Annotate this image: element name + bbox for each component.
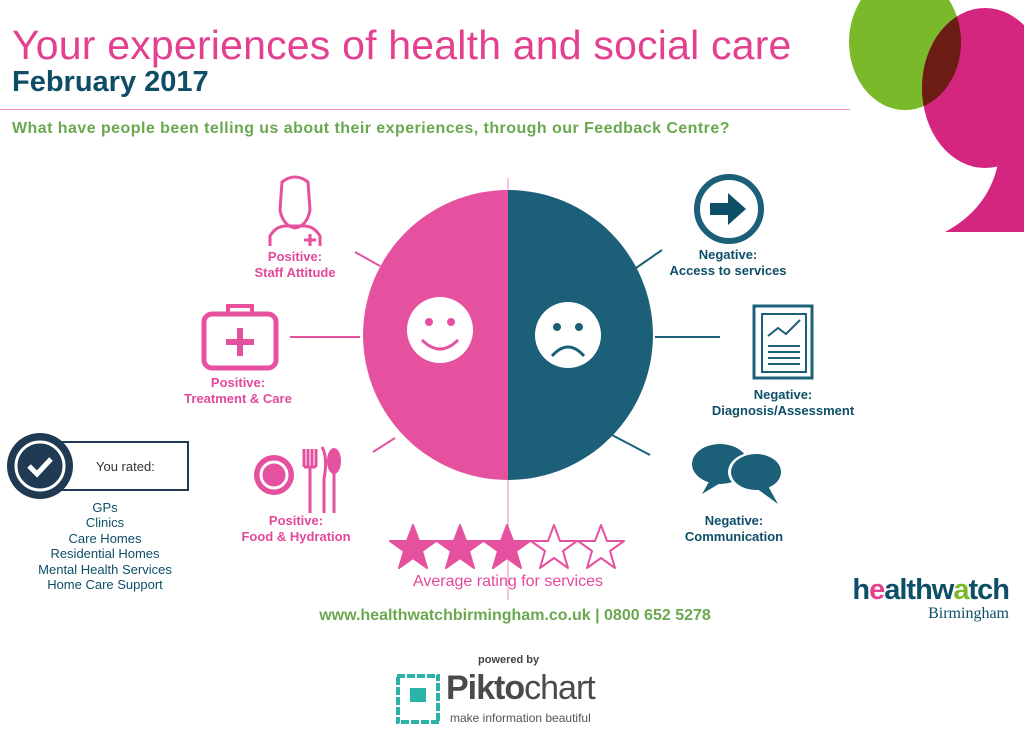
- label: diagnosis: Diagnosis/Assessment: [712, 403, 854, 418]
- label: food: [241, 513, 351, 544]
- piktochart logo: make information beautiful: [450, 711, 591, 725]
- you rated panel: Care Homes: [69, 531, 141, 546]
- label: food: Food & Hydration: [241, 529, 351, 544]
- you rated panel: Clinics: [86, 515, 124, 530]
- contact: www.healthwatchbirmingham.co.uk | 0800 652 5278: [319, 607, 711, 624]
- piktochart logo: powered by: [478, 654, 539, 666]
- label: communication: Negative:: [705, 513, 763, 528]
- icon: speech bubbles: [692, 444, 781, 504]
- title: Your experiences of health and social care: [12, 22, 792, 68]
- piktochart logo: Piktochart: [446, 669, 595, 707]
- you rated panel: [7, 433, 189, 592]
- you rated panel: Home Care Support: [47, 577, 163, 592]
- icon: medical kit: [202, 304, 278, 370]
- label: access: Access to services: [669, 263, 787, 278]
- label: communication: [685, 513, 783, 544]
- label: staff attitude: Staff Attitude: [254, 265, 336, 280]
- icon: food: [254, 446, 341, 513]
- question text: What have people been telling us about their experiences, through our Feedback Centre?: [12, 120, 730, 137]
- you rated panel: You rated:: [96, 459, 155, 474]
- label: staff attitude: Positive:: [268, 249, 322, 264]
- rating caption: Average rating for services: [413, 573, 603, 590]
- icon: staff: [268, 176, 322, 246]
- piktochart logo: [396, 654, 596, 725]
- healthwatch logo: healthwatch: [852, 574, 1009, 606]
- healthwatch logo: [852, 574, 1009, 622]
- label: staff attitude: [254, 249, 336, 280]
- you rated panel: Residential Homes: [50, 546, 160, 561]
- label: access: Negative:: [699, 247, 757, 262]
- you rated panel: GPs: [92, 500, 118, 515]
- decorative quote marks: [849, 0, 1024, 232]
- icon: arrow circle: [694, 174, 764, 244]
- subtitle date: February 2017: [12, 66, 209, 98]
- star rating: [389, 524, 625, 569]
- label: diagnosis: [712, 387, 854, 418]
- label: diagnosis: Negative:: [754, 387, 812, 402]
- label: food: Positive:: [269, 513, 323, 528]
- label: treatment: [184, 375, 292, 406]
- label: communication: Communication: [685, 529, 783, 544]
- label: treatment: Positive:: [211, 375, 265, 390]
- label: treatment: Treatment & Care: [184, 391, 292, 406]
- icon: document: [752, 304, 814, 380]
- label: access: [669, 247, 787, 278]
- you rated panel: Mental Health Services: [38, 562, 172, 577]
- healthwatch logo: Birmingham: [928, 605, 1009, 622]
